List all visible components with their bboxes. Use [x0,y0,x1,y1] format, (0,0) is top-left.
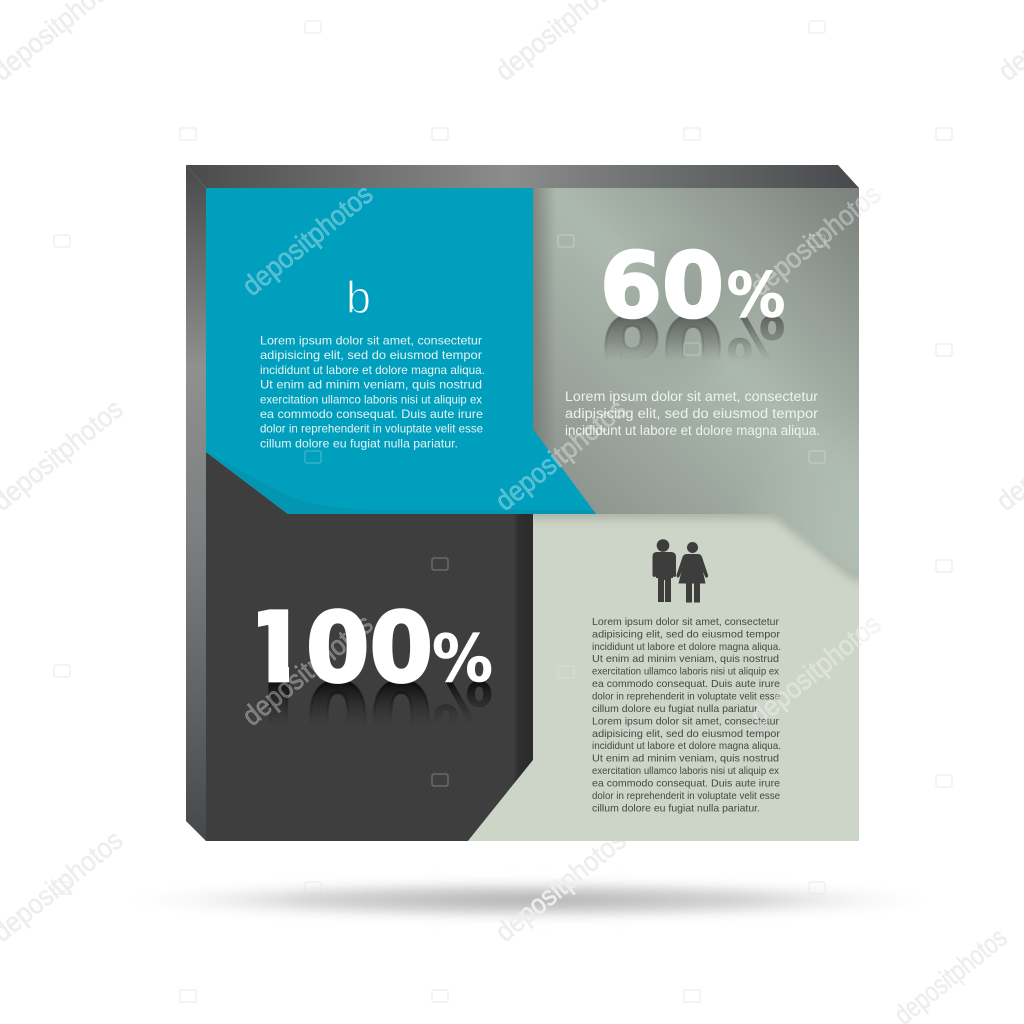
reflection: 60%: % [726,302,786,374]
text block: light panel: Lorem ipsum dolor sit amet, consectetur [592,716,780,727]
text block: blue panel: exercitation ullamco laboris nisi ut aliquip ex [260,392,482,406]
panel: light text [468,512,862,841]
text block: light panel: incididunt ut labore et dolore magna aliqua. [592,642,781,653]
background watermarks: depositphotos [489,824,632,948]
foreground watermarks: depositphotos [489,393,632,517]
foreground watermarks: depositphotos [236,178,379,302]
reflection: 100%: % [432,666,493,741]
text block: blue panel: cillum dolore eu fugiat nulla pariatur. [260,436,458,450]
stat: 100%: 00 [306,592,433,704]
stat: 100% [258,608,492,684]
foreground watermarks: depositphotos [236,608,379,732]
text block: blue panel: incididunt ut labore et dolore magna aliqua. [260,363,485,377]
foreground watermarks: depositphotos [744,178,887,302]
text block: grey panel: incididunt ut labore et dolore magna aliqua. [565,423,820,438]
text block: light panel [592,617,781,814]
text block: blue panel: ea commodo consequat. Duis aute irure [260,407,483,421]
text block: light panel: exercitation ullamco laboris nisi ut aliquip ex [592,766,780,777]
foreground watermarks [236,178,887,732]
text block: light panel: cillum dolore eu fugiat nulla pariatur. [592,704,760,715]
text block: light panel: Ut enim ad minim veniam, quis nostrud [592,654,779,665]
panel: grey 60% [533,188,859,580]
foreground watermarks: depositphotos [744,608,887,732]
stat: 60%: % [726,258,786,332]
reflection: 60%: 60 [600,294,724,400]
reflection: 100%: 1 [242,659,309,771]
panel: dark 100% [206,452,533,841]
reflection: 100% [268,680,492,718]
text block: light panel: ea commodo consequat. Duis aute irure [592,778,780,790]
text block: blue panel [260,334,485,450]
text block: light panel: Ut enim ad minim veniam, quis nostrud [592,754,779,765]
text block: grey panel: Lorem ipsum dolor sit amet, consectetur [565,389,819,404]
text block: blue panel: Lorem ipsum dolor sit amet, consectetur [260,334,482,348]
icon: man and woman [652,539,708,602]
stat: 60% [600,234,786,338]
background watermarks: depositphotos [744,608,887,732]
text block: light panel: Lorem ipsum dolor sit amet, consectetur [592,617,780,628]
panel: blue [206,188,596,514]
text block: light panel: adipisicing elit, sed do eiusmod tempor [592,729,781,740]
stat: 100%: 1 [242,592,309,704]
text block: blue panel: adipisicing elit, sed do eiusmod tempor [260,348,482,362]
text block: light panel: incididunt ut labore et dolore magna aliqua. [592,741,781,752]
text block: blue panel: dolor in reprehenderit in voluptate velit esse [260,422,483,436]
text block: light panel: adipisicing elit, sed do eiusmod tempor [592,629,781,640]
stat: 100%: % [432,622,493,697]
text block: light panel: dolor in reprehenderit in voluptate velit esse [592,791,780,802]
text block: grey panel: adipisicing elit, sed do eiusmod tempor [565,406,819,421]
text block: light panel: exercitation ullamco laboris nisi ut aliquip ex [592,667,780,678]
stat: 60%: 60 [600,234,724,338]
background watermarks: depositphotos [744,178,887,302]
text block: light panel: ea commodo consequat. Duis aute irure [592,679,780,690]
reflection: 60% [600,294,786,400]
text block: blue panel: Ut enim ad minim veniam, quis nostrud [260,378,482,392]
text block: light panel: cillum dolore eu fugiat nulla pariatur. [592,803,760,814]
text block: light panel: dolor in reprehenderit in voluptate velit esse [592,692,780,702]
ground shadow [100,878,960,922]
text block: grey panel [565,389,820,438]
reflection: 100%: 00 [306,659,433,771]
foreground camera marks [305,235,825,786]
letter b: b [346,272,371,323]
box frame [186,165,859,841]
